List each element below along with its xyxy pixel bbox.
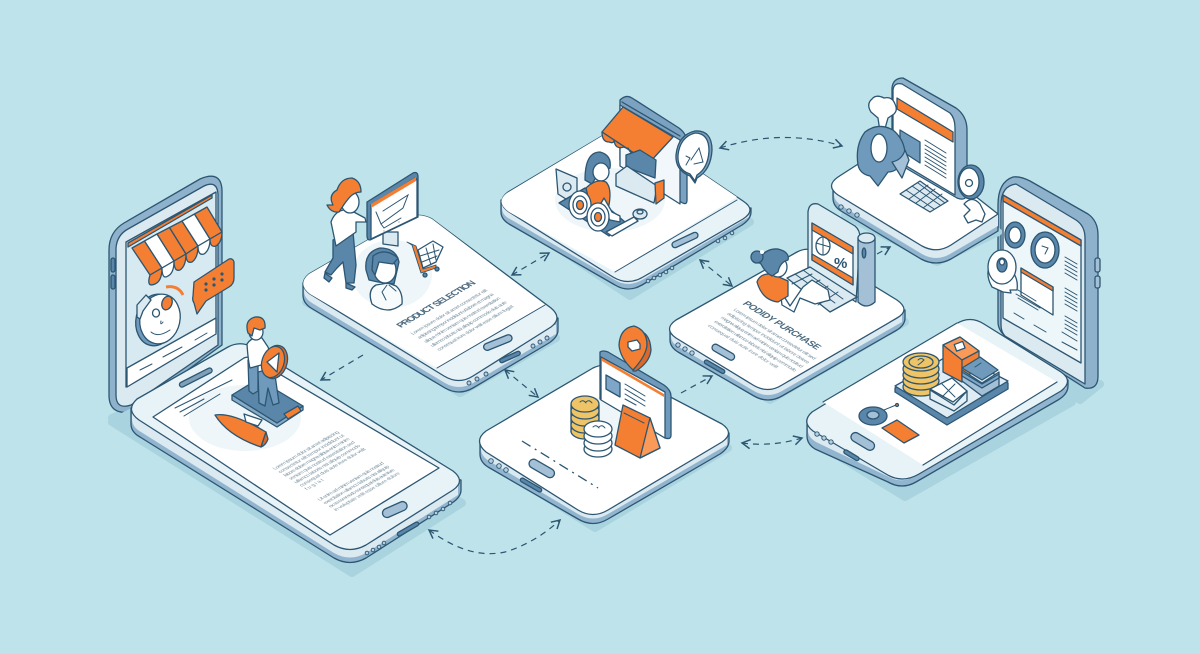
arrow: article to payment curve bbox=[429, 520, 560, 554]
text block: article paragraph two: Ut enim ad minim veniam quis nostrud bbox=[317, 461, 386, 502]
text block: purchase copy bbox=[706, 308, 817, 377]
icon: small disc bbox=[633, 209, 647, 219]
icon: smiley dial bbox=[131, 287, 185, 350]
icon: knob bbox=[859, 404, 898, 425]
icon: clock dial bbox=[1031, 232, 1059, 268]
phone 1: flat phone with article bbox=[112, 317, 462, 573]
pill button bottom bbox=[381, 500, 409, 519]
icon: cylinder bbox=[858, 233, 875, 306]
icon: stack of books bbox=[962, 357, 999, 396]
text block: purchase copy: magna aliqua enim ad minim veniam quis nostrud bbox=[719, 316, 804, 369]
arrow: stall to policy bbox=[700, 260, 732, 286]
icon: browser window bbox=[600, 351, 671, 439]
icon: blue book platform bbox=[232, 379, 303, 427]
icon: orange tent card bbox=[615, 405, 660, 458]
text block: purchase copy: exercitation ullamco laboris nisi aliquip commodo bbox=[712, 320, 798, 373]
arrow: policy to monitor bbox=[877, 247, 890, 254]
icon: silver coins bbox=[584, 421, 612, 457]
text block: article paragraph one: labore dolore magna aliqua enim minim bbox=[282, 437, 352, 478]
text block: article paragraph two: exercitation ullamco laboris nisi aliquip bbox=[322, 465, 392, 505]
icon: speech bubble with note bbox=[676, 131, 712, 183]
icon: small bubble bbox=[958, 165, 984, 199]
text block: product copy: consequat irure dolor velit esse cillum fugiat bbox=[436, 304, 516, 352]
icon: orange awning bbox=[602, 107, 673, 163]
text block: article paragraph one: consequat duis aute irure dolor velit bbox=[298, 447, 368, 488]
tray with coins, boxes and books bbox=[895, 337, 1008, 425]
icon: gold coin stack bbox=[903, 353, 939, 396]
icon: bullet pencil bbox=[215, 415, 268, 447]
icon: clerk behind counter bbox=[616, 150, 664, 204]
icon: laptop bbox=[787, 204, 860, 312]
text block: product copy: adipiscing tempor incididunt ut labore et magna bbox=[416, 293, 496, 340]
heading: policy purchase: PODIDY PURCHASE bbox=[739, 300, 824, 352]
text block: product copy bbox=[410, 288, 516, 352]
text block: article paragraph one: consectetur elit tempor incididunt ut bbox=[277, 434, 347, 474]
icon: user avatar bbox=[366, 248, 402, 310]
arrow: product to article bbox=[321, 355, 363, 380]
phone 4: policy purchase with laptop bbox=[670, 204, 905, 400]
icon: person at laptop bbox=[751, 249, 830, 312]
icon: location pin bbox=[619, 326, 651, 371]
icon: small shopping cart bbox=[407, 241, 443, 277]
text block: product copy: Lorem ipsum dolor sit amet consectetur elit bbox=[410, 288, 490, 336]
icon: monitor with shopping cart bbox=[367, 172, 418, 246]
text block: article paragraph two: in voluptate velit esse cillum dolore bbox=[333, 472, 402, 512]
icon: ring gauge bbox=[1005, 222, 1025, 248]
speaker grille bbox=[843, 449, 860, 461]
icon: location bubble bbox=[988, 250, 1017, 293]
icon: wrench bbox=[964, 200, 985, 223]
arrow: product to stall bbox=[512, 253, 549, 275]
speaker grille bbox=[499, 351, 521, 363]
pill button bbox=[671, 231, 699, 249]
phone 1: standing storefront phone bbox=[109, 176, 234, 430]
phone 7: bottom centre payment bbox=[480, 326, 729, 528]
phone 5: top right monitor and repair icons bbox=[832, 78, 998, 263]
arrow: stall to monitor curve bbox=[720, 137, 842, 148]
phone 3: top centre market stall scene bbox=[501, 96, 751, 296]
text block: article paragraph two bbox=[317, 461, 402, 512]
pill button bbox=[849, 431, 876, 452]
icon: keyboard bbox=[900, 181, 948, 212]
arrow: payment to finance bbox=[742, 438, 802, 444]
icon: walking person bbox=[324, 178, 366, 290]
text block: purchase copy: Lorem ipsum dolor sit amet consectetur elit sed bbox=[731, 308, 817, 361]
text block: product copy: ullamco laboris nisi aliquip commodo duis aute bbox=[429, 301, 509, 348]
speaker grille bbox=[397, 521, 419, 537]
arrow: product to payment bbox=[505, 370, 538, 397]
icon: card with lines bbox=[1016, 268, 1053, 315]
speaker grille bbox=[520, 477, 542, 493]
text block: purchase copy: consequat duis aute irure dolor velit bbox=[706, 324, 780, 370]
phone 6: standing storefront phone with dashboard bbox=[988, 177, 1100, 400]
panel with awning bbox=[602, 96, 687, 204]
text block: purchase copy: adipiscing tempor incididunt ut labore dolore bbox=[725, 312, 811, 365]
icon: striped awning bbox=[132, 207, 222, 285]
icon: blue support dial with cloud bbox=[857, 96, 909, 186]
phone 2: product selection bbox=[303, 172, 558, 393]
text block: article paragraph one: veniam quis nostrud exercitation sed bbox=[288, 441, 357, 481]
heading: product selection: PRODUCT SELECTION bbox=[394, 279, 479, 330]
speaker grille bbox=[704, 359, 726, 374]
pale pool bbox=[555, 168, 665, 232]
pill button top bbox=[179, 367, 213, 388]
icon: person with orange shield bbox=[247, 317, 292, 406]
icon: laptop: % bbox=[834, 255, 847, 272]
icon: orange chat bubble bbox=[193, 259, 234, 314]
arrow: payment to policy bbox=[681, 376, 712, 393]
icon: white box bbox=[930, 378, 967, 411]
text block: article paragraph two: ex ea commodo consequat duis aute irure bbox=[327, 468, 397, 509]
pill button bbox=[527, 458, 556, 479]
pill button bbox=[711, 343, 736, 361]
icon: orange box bbox=[943, 337, 979, 382]
icon: orange card bbox=[882, 420, 919, 443]
text block: product copy: aliqua minim veniam quis nostrud exercitation bbox=[423, 297, 503, 344]
text block: article paragraph one bbox=[272, 430, 374, 491]
text block: article paragraph one: fugiat bbox=[304, 478, 326, 491]
phone 6: flat phone with finance items bbox=[807, 320, 1072, 497]
icon: gold coins bbox=[571, 396, 599, 439]
icon: seated operator bbox=[556, 152, 638, 236]
icon: desktop monitor bbox=[892, 78, 967, 199]
text block: article paragraph one: Lorem ipsum dolor sit amet adipiscing bbox=[272, 430, 341, 471]
pill button bbox=[483, 334, 513, 351]
text block: article paragraph one: ullamco laboris nisi aliquip commodo bbox=[293, 444, 363, 485]
